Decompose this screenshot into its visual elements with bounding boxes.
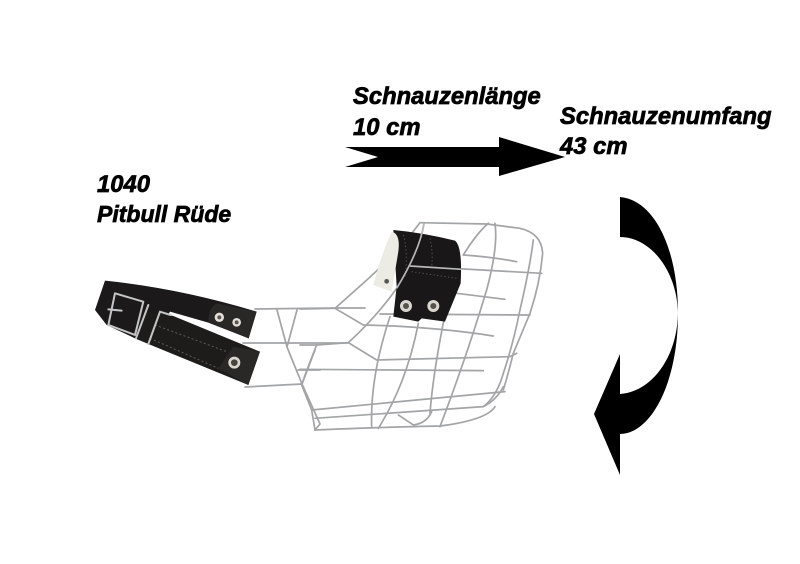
label: snout circumference: [559, 103, 772, 160]
label: model and breed: Pitbull Rüde: [97, 201, 231, 227]
label: model and breed: [97, 171, 231, 227]
wire muzzle illustration: [95, 223, 543, 430]
label: snout length: Schnauzenlänge: [353, 83, 541, 110]
muzzle wire cage: [243, 223, 543, 430]
label: snout length: 10 cm: [353, 114, 420, 141]
upper strap: [95, 281, 257, 344]
lower strap: [135, 310, 260, 385]
label: snout circumference: Schnauzenumfang: [560, 103, 772, 130]
label: snout circumference: 43 cm: [559, 133, 627, 160]
label: model and breed: 1040: [97, 171, 150, 198]
arrow: snout length: [345, 137, 565, 176]
leather noseband: [373, 223, 462, 322]
arrow: circumference curved: [594, 197, 678, 475]
leather strap with buckle: [95, 281, 260, 385]
label: snout length: [353, 83, 541, 141]
